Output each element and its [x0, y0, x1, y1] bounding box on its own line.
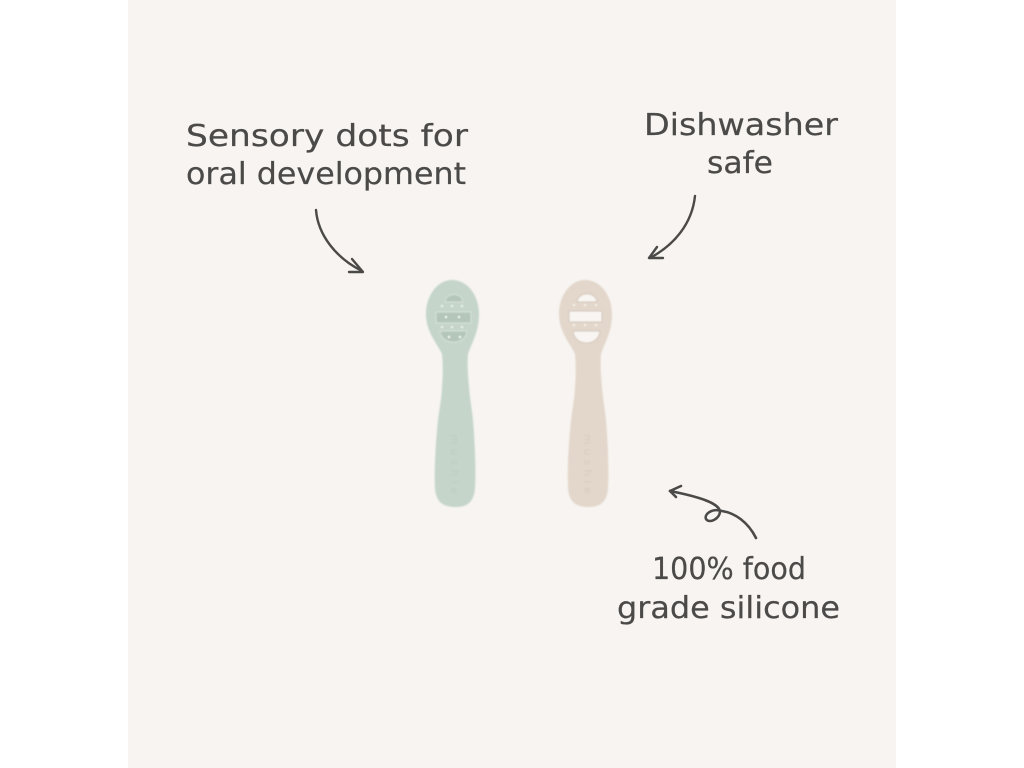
label: food grade silicone [617, 552, 840, 626]
label: food grade silicone: 100% food [652, 552, 806, 587]
green spoon [426, 280, 479, 507]
label: dishwasher safe [644, 108, 839, 181]
arrow: sensory dots to green spoon [316, 210, 363, 272]
sensory dots on green spoon [440, 304, 464, 338]
label: sensory dots: oral development [186, 157, 466, 192]
beige spoon [559, 280, 612, 507]
background panel [128, 0, 896, 768]
label: dishwasher safe: safe [707, 146, 773, 181]
label: sensory dots: Sensory dots for [186, 119, 469, 154]
arrow: dishwasher safe to beige spoon [649, 196, 695, 258]
arrow: silicone label to beige spoon [670, 486, 756, 538]
label: sensory dots [186, 119, 469, 192]
label: food grade silicone: grade silicone [617, 591, 840, 626]
label: dishwasher safe: Dishwasher [644, 108, 839, 143]
embossed logo on beige spoon: mushie [581, 434, 594, 494]
dots on beige spoon [572, 304, 598, 326]
embossed logo on green spoon: mushie [448, 434, 461, 494]
cut-out holes on beige spoon [569, 294, 602, 343]
sensory holes on green spoon [436, 294, 471, 342]
